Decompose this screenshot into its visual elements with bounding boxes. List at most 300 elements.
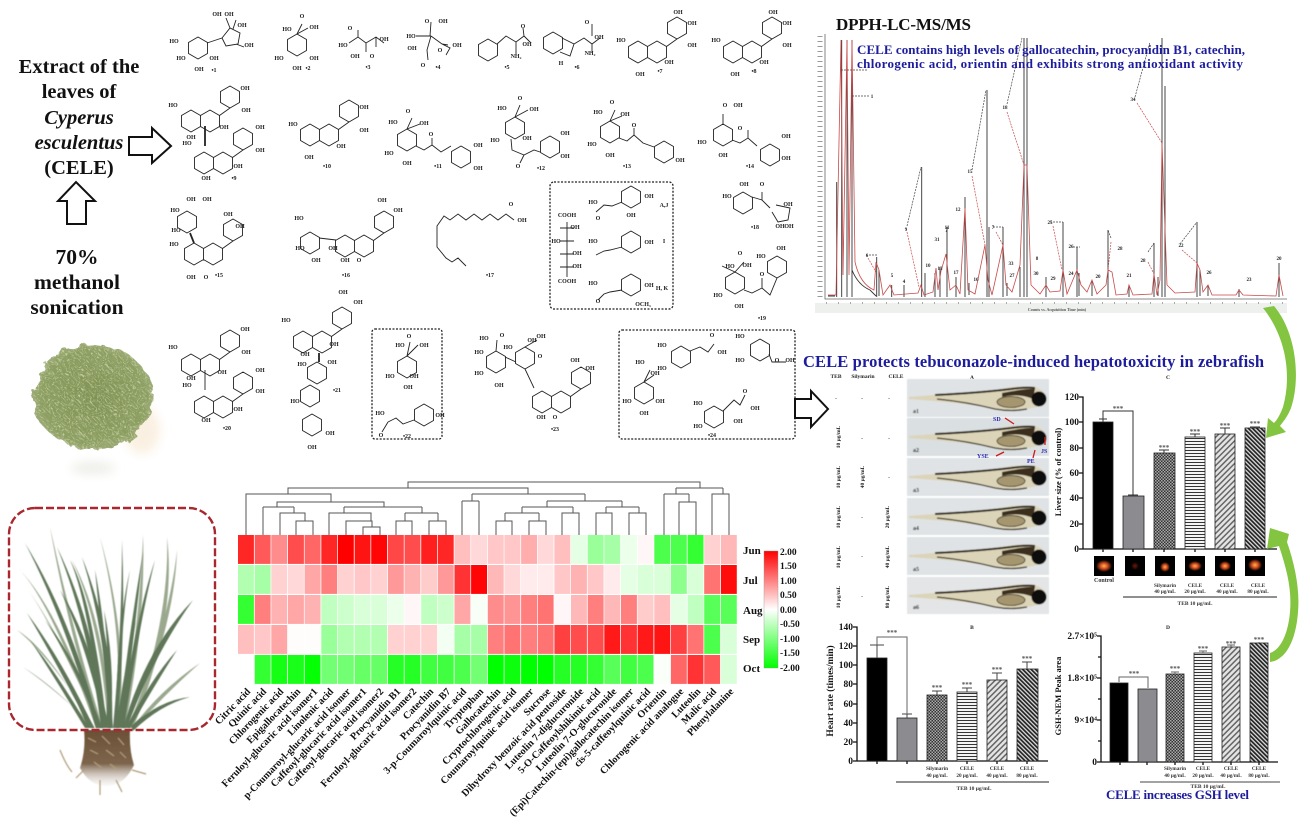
- molecule 10 catechin: OH: [336, 144, 346, 150]
- peak number labels: 27: [1010, 274, 1015, 279]
- left text: 70% methanol sonication: sonication: [30, 295, 124, 319]
- molecule 14: [697, 103, 791, 170]
- panel A: zebrafish dosing table: -: [835, 396, 837, 402]
- panel A: zebrafish dosing table: [830, 374, 974, 608]
- heading: zebrafish hepatotoxicity: CELE protects tebuconazole-induced hepatotoxicity in zebrafish: [803, 352, 1264, 371]
- left text: extract of the leaves: Extract of the: [19, 56, 139, 78]
- molecule 7: OH: [687, 21, 697, 27]
- molecule 5 phenylalanine: OH: [522, 42, 532, 48]
- heatmap colour legend: -1.50: [780, 649, 800, 659]
- molecule 1 disaccharide: HO: [169, 39, 179, 45]
- peak number labels: 28: [1140, 259, 1146, 264]
- molecule 11: HO: [384, 151, 394, 157]
- chart B: heart rate: 80: [844, 680, 853, 690]
- chromatogram axes: [815, 34, 1287, 313]
- dashed box A: feruloyl-glucaric structures: HO: [588, 200, 598, 206]
- chart B: heart rate: 0: [848, 757, 853, 767]
- chart B: heart rate: ***: [962, 681, 973, 689]
- dashed box A: feruloyl-glucaric structures: O: [596, 216, 601, 222]
- molecule 13: HO: [593, 110, 603, 116]
- molecule 19: HO: [725, 264, 735, 270]
- fish a3: a3: [913, 488, 919, 494]
- molecule 20 procyanidin dimer: OH: [240, 327, 250, 333]
- molecule 2 quinic acid: •2: [305, 66, 311, 72]
- dashed box A: feruloyl-glucaric structures: OCH₃: [635, 302, 651, 308]
- molecule 3 malic acid: OH: [350, 54, 360, 60]
- dashed box: quinic and coumaric acids: O: [379, 433, 384, 439]
- molecule 12: OH: [529, 107, 539, 113]
- group labels: CELE: [1220, 583, 1235, 589]
- dashed box: quinic and caffeic acids: OH: [750, 406, 760, 412]
- molecule 3 malic acid: OH: [379, 37, 389, 43]
- molecule 17 linolenic acid: O: [509, 202, 514, 208]
- dashed box: quinic and coumaric acids: HO: [385, 374, 395, 380]
- heatmap compound labels: Quinic acid: [226, 686, 269, 730]
- fish a2: [907, 418, 1049, 456]
- dashed box: quinic and caffeic acids: OH: [733, 419, 743, 425]
- molecule 12: O: [516, 164, 521, 170]
- molecule 20 procyanidin dimer: OH: [186, 376, 196, 382]
- dashed box: quinic and coumaric acids: OH: [435, 413, 445, 419]
- panel A: zebrafish dosing table: -: [888, 396, 890, 402]
- heatmap compound labels: Procyanidin B7: [398, 686, 453, 743]
- y axis label: Liver size (% of control): [1053, 428, 1063, 516]
- molecule 18: OH: [775, 224, 785, 230]
- heatmap compound labels: Chlorogenic acid analogue: [598, 686, 686, 777]
- chart D: GSH-NEM: 0: [1092, 758, 1097, 768]
- peak number labels: 20: [1096, 275, 1101, 280]
- molecule 9 procyanidin dimer: OH: [255, 148, 265, 154]
- heatmap colour legend: -1.00: [780, 635, 800, 645]
- molecule 12: OH: [560, 154, 570, 160]
- molecule 11: OH: [473, 143, 483, 149]
- dashed box A: feruloyl-glucaric structures: OH: [644, 194, 654, 200]
- left text: extract of the leaves: leaves of: [42, 81, 117, 103]
- molecule 3 malic acid: HO: [338, 43, 348, 49]
- molecule 3 malic acid: O: [348, 26, 353, 32]
- panel A: zebrafish dosing table: 10 μg/mL: [836, 425, 842, 448]
- peak number labels: 1: [871, 95, 874, 100]
- molecule 20 procyanidin dimer: OH: [255, 368, 265, 374]
- dashed box: quinic and coumaric acids: •22: [403, 434, 411, 440]
- chart D: GSH-NEM: ***: [1226, 640, 1237, 648]
- chart D: GSH-NEM: 1.8×10⁵: [1067, 674, 1097, 684]
- molecule 9 procyanidin dimer: OH: [233, 164, 243, 170]
- panel A: zebrafish dosing table: 40 μg/mL: [860, 465, 866, 488]
- molecule 7: OH: [664, 60, 674, 66]
- molecule 21 trimer: HO: [297, 362, 307, 368]
- panel A: zebrafish dosing table: 10 μg/mL: [836, 465, 842, 488]
- molecule 12: OH: [560, 131, 570, 137]
- group labels: 40 μg/mL: [986, 773, 1008, 779]
- error bars and significance bracket: [1099, 419, 1260, 496]
- group labels: TEB 10 μg/mL: [1178, 601, 1213, 607]
- molecule 12: OH: [522, 136, 532, 142]
- group labels: CELE: [1196, 766, 1211, 772]
- molecule 18: OH: [784, 224, 794, 230]
- group labels: TEB 10 μg/mL: [957, 786, 992, 792]
- molecule 9 procyanidin dimer: [168, 86, 265, 182]
- peak number labels: 31: [934, 238, 940, 243]
- chart C: liver size: ***: [1250, 420, 1261, 428]
- fish a5: [907, 537, 1049, 575]
- fish a1: a1: [913, 409, 919, 415]
- molecule 18: OH: [783, 202, 793, 208]
- heatmap compound labels: Tryptophan: [442, 686, 486, 731]
- molecule 3 malic acid: •3: [365, 65, 371, 71]
- fish annotations SD YSE PE JS: [977, 417, 1048, 465]
- molecule 4 citric acid: [406, 19, 462, 71]
- heatmap compound labels: Linolenic acid: [286, 686, 336, 738]
- molecule 6 tryptophan: [544, 20, 604, 71]
- molecule 20 procyanidin dimer: OH: [201, 418, 211, 424]
- heading DPPH-LC-MS/MS: DPPH-LC-MS/MS: [836, 15, 971, 34]
- dashed box A: feruloyl-glucaric structures: COOH: [558, 279, 576, 285]
- fish a4: [907, 498, 1049, 535]
- molecule 11: OH: [419, 121, 429, 127]
- molecule 21 trimer: HO: [281, 318, 291, 324]
- left text: 70% methanol sonication: methanol: [34, 270, 120, 294]
- molecule 16 luteolin glucuronide: [294, 198, 403, 279]
- molecule 15 orientin: HO: [170, 208, 180, 214]
- peak number labels: 12: [956, 208, 961, 213]
- chart B: heart rate: 20: [844, 738, 853, 748]
- molecule 12: O: [518, 96, 523, 102]
- dashed box: quinic and caffeic acids: OH: [655, 399, 665, 405]
- heatmap compound labels: 3-p-Coumaroylquinic acid: [382, 686, 469, 776]
- molecule 21 trimer: [281, 290, 363, 451]
- heatmap colour legend: 1.50: [780, 562, 797, 572]
- molecule 13: OH: [620, 112, 630, 118]
- molecule 11: OH: [402, 161, 412, 167]
- molecule 16 luteolin glucuronide: OH: [328, 246, 338, 252]
- molecule 17 linolenic acid: •17: [486, 273, 494, 279]
- molecule 4 citric acid: O: [425, 19, 430, 25]
- group labels: CELE: [1020, 766, 1035, 772]
- dashed box: quinic and caffeic acids: •24: [708, 433, 716, 439]
- heatmap compound labels: Gallocatechin: [454, 686, 503, 737]
- peak number labels: 34: [1130, 98, 1136, 103]
- row Sep: [238, 625, 737, 654]
- error bars and bracket: [870, 645, 1032, 718]
- molecule 13: O: [632, 123, 637, 129]
- molecule 18: [722, 182, 794, 231]
- molecule 6 tryptophan: NH₂: [585, 51, 596, 57]
- molecule 3 malic acid: O: [370, 54, 375, 60]
- group labels: 40 μg/mL: [926, 773, 948, 779]
- molecule 7: HO: [616, 38, 626, 44]
- left text: extract of the leaves: esculentus: [35, 132, 123, 154]
- photo: Cyperus esculentus plant: [9, 508, 215, 795]
- peak number labels: 8: [1036, 257, 1039, 262]
- molecule 11: O: [406, 109, 411, 115]
- molecule 19: O: [760, 272, 765, 278]
- molecule 14: HO: [697, 140, 707, 146]
- heatmap colour legend: [764, 548, 800, 674]
- dashed box: quinic and caffeic acids: HO: [657, 343, 667, 349]
- molecule 4 citric acid: O: [421, 63, 426, 69]
- chart C: liver size: ***: [1159, 444, 1170, 452]
- molecule 4 citric acid: OH: [407, 46, 417, 52]
- callout: CELE contains high levels: chlorogenic acid, orientin and exhibits strong antioxidant activity: [857, 56, 1244, 71]
- heatmap month labels: [743, 545, 763, 675]
- group labels: CELE: [990, 766, 1005, 772]
- molecule 1 disaccharide: HO: [176, 56, 186, 62]
- molecule 10 catechin: •10: [323, 164, 331, 170]
- chart D: GSH-NEM: 9×10⁴: [1074, 716, 1097, 726]
- dashed box: quinic and caffeic acids: O: [710, 333, 715, 339]
- red trace: [828, 40, 1283, 296]
- heatmap compound labels: Phenylalanine: [685, 686, 736, 738]
- chart C: liver size: [1053, 375, 1277, 607]
- peak callout lines: [841, 38, 1197, 255]
- row Jul: [238, 565, 737, 594]
- molecule 21 trimer: OH: [329, 342, 339, 348]
- peak number labels: 25: [1048, 221, 1053, 226]
- dashed box: quinic and caffeic acids: HO: [635, 360, 645, 366]
- dashed box: quinic and caffeic acids: HO: [735, 334, 745, 340]
- dashed box A: feruloyl-glucaric structures: OH: [572, 251, 582, 257]
- chart D: GSH-NEM: ***: [1129, 670, 1140, 678]
- heatmap compound labels: Orientin: [635, 686, 669, 721]
- caption: CELE increases GSH level: CELE increases GSH level: [1106, 787, 1249, 802]
- heatmap compound labels: p-Coumaroyl-glucaric acid isomer: [242, 686, 353, 801]
- fish annotations SD YSE PE JS: YSE: [977, 454, 989, 460]
- molecule 8: •8: [751, 69, 757, 75]
- axes: [1079, 397, 1277, 552]
- molecule 8: HO: [711, 38, 721, 44]
- molecule 9 procyanidin dimer: OH: [241, 108, 251, 114]
- group labels: CELE: [1224, 766, 1239, 772]
- molecule 15 orientin: OH: [186, 275, 196, 281]
- molecule 10 catechin: OH: [359, 105, 369, 111]
- dashed box A: feruloyl-glucaric structures: OH: [570, 225, 580, 231]
- peak number labels: [866, 95, 1282, 285]
- heatmap compound labels: Luteolin 7-O-glucuronide: [534, 686, 619, 774]
- molecule 8: OH: [768, 10, 778, 16]
- molecule 20 procyanidin dimer: OH: [233, 407, 243, 413]
- molecule 11: •11: [434, 164, 442, 170]
- molecule 1 disaccharide: OH: [212, 12, 222, 18]
- left text: 70% methanol sonication: 70%: [56, 245, 98, 269]
- row Oct: [255, 655, 737, 684]
- group labels: Silymarin: [1164, 766, 1186, 772]
- molecule 6 tryptophan: OH: [594, 35, 604, 41]
- molecule 10 catechin: [288, 100, 369, 170]
- fish a2: a2: [913, 448, 919, 454]
- molecule 4 citric acid: O: [438, 48, 443, 54]
- molecule 18: O: [760, 182, 765, 188]
- molecule 19: OH: [776, 246, 786, 252]
- molecule 2 quinic acid: HO: [274, 56, 284, 62]
- molecule 16 luteolin glucuronide: HO: [294, 216, 304, 222]
- panel A: zebrafish dosing table: 20 μg/mL: [885, 505, 891, 528]
- heatmap compound labels: Coumaroylquinic acid isomer: [439, 686, 536, 787]
- heatmap compound labels: Caffeoyl-glucaric acid isomer1: [269, 686, 369, 790]
- molecule 22 luteolin diglucuronide: OH: [494, 383, 504, 389]
- group labels: 80 μg/mL: [1016, 773, 1038, 779]
- dark branches: [246, 482, 729, 535]
- molecule 14: O: [723, 103, 728, 109]
- molecule 12: HO: [497, 106, 507, 112]
- liver fluorescence thumbnails: [1094, 556, 1265, 576]
- molecule 15 orientin: HO: [171, 228, 181, 234]
- dashed box A: feruloyl-glucaric structures: [550, 182, 673, 309]
- molecule 19: HO: [756, 254, 766, 260]
- group labels: CELE: [1251, 583, 1266, 589]
- molecule 14: •14: [746, 164, 754, 170]
- peak number labels: 13: [938, 267, 943, 272]
- molecule 22 luteolin diglucuronide: O: [500, 333, 505, 339]
- group labels: [1094, 578, 1269, 607]
- panel: compound structures: [168, 10, 795, 451]
- molecule 19: [713, 246, 786, 322]
- molecule 20 procyanidin dimer: OH: [241, 350, 251, 356]
- molecule 1 disaccharide: [169, 12, 254, 74]
- panel A: zebrafish dosing table: Silymarin: [851, 374, 875, 380]
- significance markers: [1119, 642, 1259, 688]
- dashed box A: feruloyl-glucaric structures: I: [663, 239, 666, 245]
- fish a3: [907, 458, 1049, 496]
- molecule 3 malic acid: [338, 26, 389, 71]
- dashed box: quinic and caffeic acids: O: [743, 389, 748, 395]
- molecule 9 procyanidin dimer: OH: [240, 86, 250, 92]
- molecule 22 luteolin diglucuronide: OH: [536, 334, 546, 340]
- group labels: CELE: [1188, 583, 1203, 589]
- chart C: liver size: 100: [1065, 418, 1079, 428]
- arrow: extract to compounds: [129, 128, 171, 163]
- dashed box: quinic and coumaric acids: OH: [419, 343, 429, 349]
- callout: CELE contains high levels: [857, 42, 1245, 71]
- molecule 13: OH: [675, 158, 685, 164]
- heatmap compound labels: Sucrose: [522, 686, 553, 718]
- molecule 14: OH: [781, 134, 791, 140]
- chart B: heart rate: 120: [839, 642, 853, 652]
- molecule 19: O: [738, 251, 743, 257]
- molecule 15 orientin: OH: [235, 224, 245, 230]
- molecule 9 procyanidin dimer: OH: [219, 125, 229, 131]
- heatmap compound labels: Cryptochlorogenic acid: [440, 686, 519, 767]
- peak number labels: 6: [866, 254, 869, 259]
- molecule 1 disaccharide: OH: [194, 67, 204, 73]
- molecule 22 luteolin diglucuronide: HO: [474, 350, 484, 356]
- molecule 2 quinic acid: O: [300, 14, 305, 20]
- fish a6: [907, 577, 1049, 614]
- molecule 17 linolenic acid: OH: [517, 218, 527, 224]
- molecule 13: [587, 100, 685, 170]
- photo: leaf powder: [33, 345, 160, 474]
- molecule 14: OH: [781, 156, 791, 162]
- heatmap compound labels: Chlorogenic acid: [227, 686, 286, 747]
- dashed box A: feruloyl-glucaric structures: OH: [572, 264, 582, 270]
- dashed box A: feruloyl-glucaric structures: A,J: [660, 203, 668, 209]
- dashed box: quinic and coumaric acids: OH: [403, 385, 413, 391]
- panel A: zebrafish dosing table: A: [970, 375, 974, 381]
- chart B: heart rate: ***: [992, 666, 1003, 674]
- group labels: Control: [1094, 578, 1114, 584]
- molecule 15 orientin: O: [204, 275, 209, 281]
- peak number labels: 26: [1068, 245, 1074, 250]
- molecule 16 luteolin glucuronide: OH: [377, 198, 387, 204]
- peak number labels: 4: [903, 280, 906, 285]
- molecule 22 luteolin diglucuronide: O: [538, 354, 543, 360]
- heatmap compound labels: Epigallocatechin: [245, 686, 303, 746]
- panel A: zebrafish dosing table: -: [888, 436, 890, 442]
- fish a4: a4: [913, 526, 919, 532]
- dashed box A: feruloyl-glucaric structures: OH: [626, 213, 636, 219]
- molecule 12: •12: [537, 166, 545, 172]
- panel A: zebrafish dosing table: 10 μg/mL: [836, 585, 842, 608]
- molecule 4 citric acid: •4: [435, 65, 441, 71]
- group labels: 40 μg/mL: [1220, 773, 1242, 779]
- molecule 14: O: [738, 126, 743, 132]
- molecule 22 luteolin diglucuronide: OH: [570, 358, 580, 364]
- heatmap month labels: Oct: [743, 663, 760, 675]
- chart C: liver size: 60: [1070, 469, 1079, 479]
- heatmap compound labels: Feruloyl-glucaric acid isomer2: [319, 686, 419, 790]
- chart C: liver size: ***: [1190, 428, 1201, 436]
- peak number labels: 15: [968, 170, 973, 175]
- panel A: zebrafish dosing table: 40 μg/mL: [885, 545, 891, 568]
- peak number labels: 29: [1050, 277, 1056, 282]
- peak number labels: 20: [1276, 257, 1282, 262]
- molecule 5 phenylalanine: NH₂: [511, 54, 522, 60]
- molecule 9 procyanidin dimer: OH: [186, 135, 196, 141]
- molecule 1 disaccharide: OH: [224, 12, 234, 18]
- heatmap dendrogram: [246, 482, 729, 535]
- molecule 21 trimer: OH: [327, 360, 337, 366]
- molecule 5 phenylalanine: O: [521, 24, 526, 30]
- molecule 11: O: [429, 132, 434, 138]
- dashed box: quinic and caffeic acids: HO: [735, 358, 745, 364]
- dashed box: quinic and caffeic acids: O: [775, 358, 780, 364]
- dashed box: quinic and caffeic acids: HO: [622, 399, 632, 405]
- panel A: zebrafish dosing table: -: [861, 515, 863, 521]
- chart C: liver size: C: [1166, 375, 1170, 381]
- group labels: 20 μg/mL: [1192, 773, 1214, 779]
- chart B: heart rate: 140: [839, 623, 853, 633]
- molecule 2 quinic acid: OH: [309, 56, 319, 62]
- molecule 15 orientin: HO: [169, 242, 179, 248]
- molecule 22 luteolin diglucuronide: •23: [551, 427, 559, 433]
- peak number labels: 9: [905, 228, 908, 233]
- group labels: Silymarin: [926, 766, 948, 772]
- molecule 16 luteolin glucuronide: OH: [340, 258, 350, 264]
- heatmap compound labels: Luteolin: [670, 686, 703, 721]
- dashed box: quinic and caffeic acids: OH: [639, 411, 649, 417]
- molecule 16 luteolin glucuronide: •16: [342, 273, 350, 279]
- dashed box: quinic and caffeic acids: OH: [717, 350, 727, 356]
- molecule 7: OH: [687, 43, 697, 49]
- molecule 13: O: [610, 100, 615, 106]
- chart C: liver size: 40: [1070, 494, 1079, 504]
- group labels: CELE: [960, 766, 975, 772]
- molecule 2 quinic acid: [274, 14, 319, 72]
- heatmap month labels: Aug: [743, 605, 763, 617]
- dashed box: quinic and coumaric acids: HO: [395, 343, 405, 349]
- group labels: 80 μg/mL: [1248, 773, 1270, 779]
- heatmap: [238, 535, 737, 684]
- heatmap month labels: Jun: [743, 545, 761, 557]
- panel A: zebrafish dosing table: -: [888, 475, 890, 481]
- callout: CELE contains high levels: CELE contains high levels of gallocatechin, procyanidin B1, catechin,: [857, 42, 1245, 57]
- dashed box A: feruloyl-glucaric structures: OH: [644, 283, 654, 289]
- molecule 17 linolenic acid: [437, 202, 527, 279]
- panel A: zebrafish dosing table: -: [861, 594, 863, 600]
- arrow: sonication to extract: [58, 182, 95, 224]
- molecule 4 citric acid: OH: [438, 19, 448, 25]
- molecule 9 procyanidin dimer: OH: [201, 176, 211, 182]
